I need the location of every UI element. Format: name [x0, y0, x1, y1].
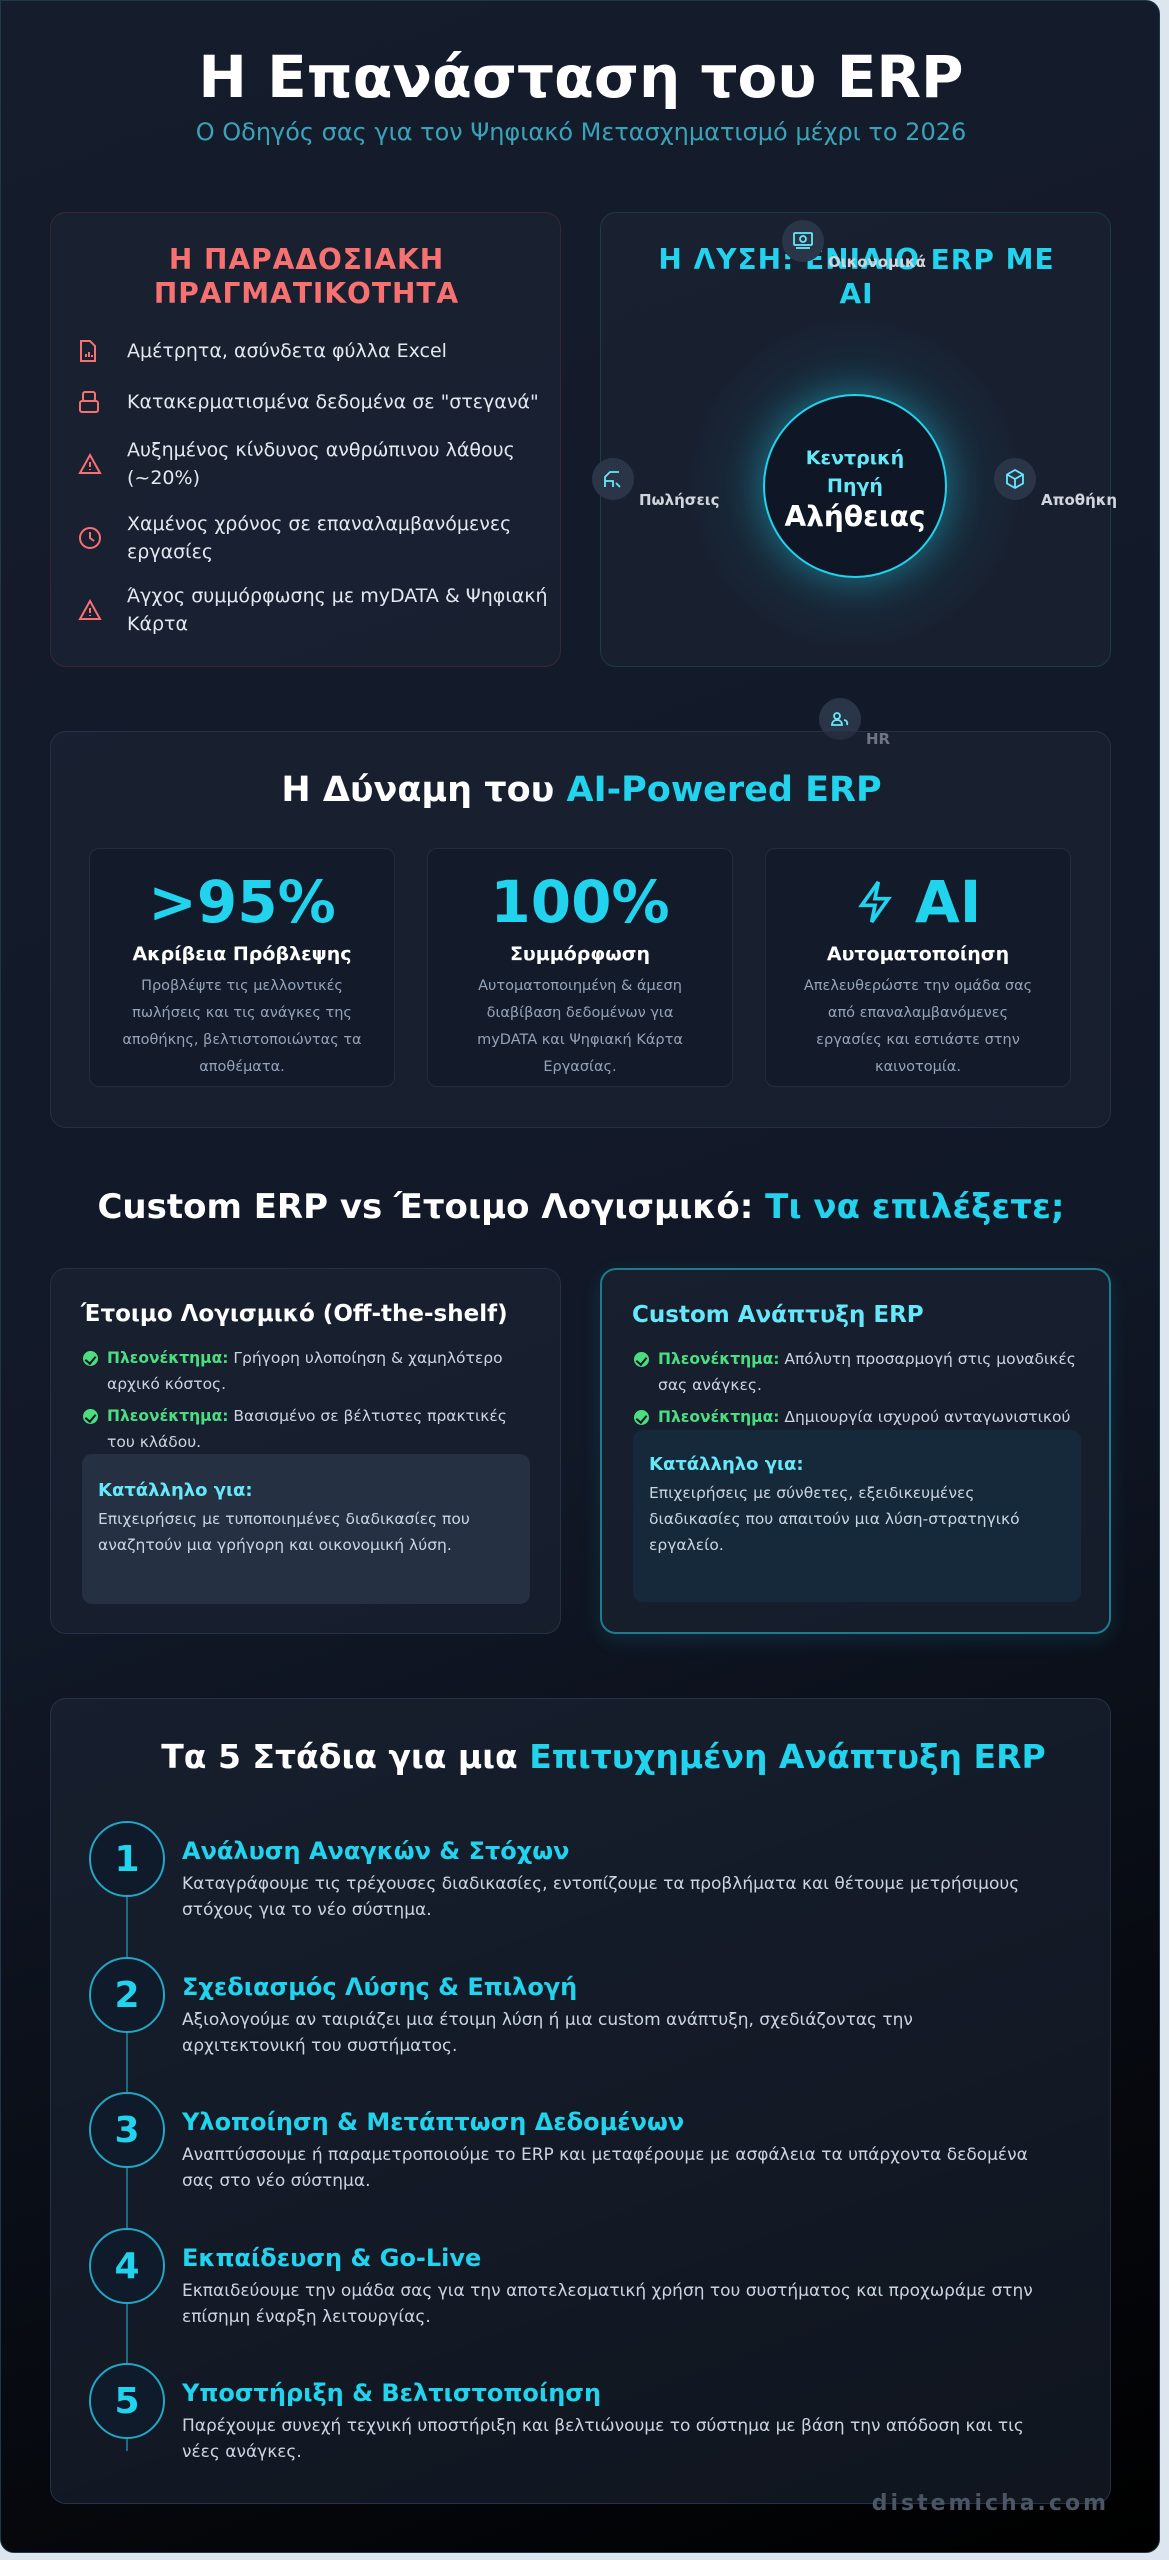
node: sales [592, 458, 634, 500]
panel: 5 stages [50, 1698, 1111, 2504]
stat: compliance [427, 848, 733, 1087]
heading: solution [658, 243, 1055, 310]
hub circle: Κεντρική [806, 447, 904, 469]
panel: off-the-shelf [50, 1268, 561, 1634]
panel: AI power [50, 731, 1111, 1128]
stat: automation: Αυτοματοποίηση [827, 943, 1009, 965]
item: time: Χαμένος χρόνος σε επαναλαμβανόμενες εργασίες [127, 513, 511, 563]
step 3: Αναπτύσσουμε ή παραμετροποιούμε το ERP και μεταφέρουμε με ασφάλεια τα υπάρχοντα δεδομένα σας στο νέο σύστημα. [182, 2145, 1028, 2191]
panel: custom [600, 1268, 1111, 1634]
step 2: Σχεδιασμός Λύσης & Επιλογή [182, 1973, 577, 2001]
step 5: 5 [114, 2380, 140, 2422]
bullet 1: Πλεονέκτημα: Απόλυτη προσαρμογή στις μοναδικές σας ανάγκες. [658, 1350, 1076, 1394]
suitable box [82, 1454, 530, 1604]
label: sales: Πωλήσεις [639, 491, 720, 509]
suitable box: Κατάλληλο για: [649, 1454, 804, 1475]
stat: compliance: 100% [490, 868, 670, 936]
item: silos: Κατακερματισμένα δεδομένα σε "στεγανά" [127, 391, 539, 413]
step 3 [89, 2092, 1028, 2191]
panel: traditional reality [50, 212, 561, 667]
heading: custom: Custom Ανάπτυξη ERP [632, 1302, 924, 1328]
subtitle: Ο Οδηγός σας για τον Ψηφιακό Μετασχηματισμό μέχρι το 2026 [196, 118, 966, 146]
step 3: 3 [114, 2110, 140, 2150]
label: HR: HR [866, 730, 890, 748]
step 4 [89, 2228, 1033, 2327]
suitable box: Επιχειρήσεις με τυποποιημένες διαδικασίες που αναζητούν μια γρήγορη και οικονομική λύση. [98, 1510, 470, 1554]
hub circle: Αλήθειας [785, 500, 925, 533]
heading: off-the-shelf: Έτοιμο Λογισμικό (Off-the-shelf) [81, 1301, 508, 1327]
step 1 [89, 1821, 1019, 1920]
node: finance [782, 220, 824, 262]
heading: traditional [154, 243, 459, 310]
stat: compliance: Συμμόρφωση [510, 943, 650, 965]
heading: solution: AI [839, 277, 874, 310]
step 5 [89, 2363, 1024, 2462]
item: compliance: Άγχος συμμόρφωσης με myDATA & Ψηφιακή Κάρτα [127, 585, 548, 635]
step 2 [89, 1957, 913, 2056]
step 3: Υλοποίηση & Μετάπτωση Δεδομένων [182, 2108, 684, 2136]
bullet 2: Πλεονέκτημα: Δημιουργία ισχυρού ανταγωνιστικού πλεονεκτήματος. [658, 1408, 1070, 1452]
suitable box [633, 1430, 1081, 1602]
step 5: Υποστήριξη & Βελτιστοποίηση [182, 2379, 601, 2407]
item: excel: Αμέτρητα, ασύνδετα φύλλα Excel [127, 340, 447, 362]
node: HR [819, 698, 861, 740]
stat: automation [765, 848, 1071, 1087]
step 1: Ανάλυση Αναγκών & Στόχων [182, 1837, 569, 1865]
title: Η Επανάσταση του ERP [198, 43, 964, 111]
panel: solution [600, 212, 1111, 667]
step 5: Παρέχουμε συνεχή τεχνική υποστήριξη και βελτιώνουμε το σύστημα με βάση την απόδοση και τις νέες ανάγκες. [182, 2416, 1024, 2462]
heading: solution: Η ΛΥΣΗ: ΕΝΙΑΙΟ ERP ΜΕ [658, 243, 1055, 276]
stat: automation: Απελευθερώστε την ομάδα σας από επαναλαμβανόμενες εργασίες και εστιάστε στην καινοτομία. [804, 978, 1032, 1075]
stat: automation: AI [915, 868, 981, 936]
heading: comparison: Custom ERP vs Έτοιμο Λογισμικό: Τι να επιλέξετε; [97, 1187, 1065, 1227]
step 4: Εκπαίδευση & Go-Live [182, 2244, 481, 2272]
step 4: Εκπαιδεύουμε την ομάδα σας για την αποτελεσματική χρήση του συστήματος και προχωράμε στην επίσημη έναρξη λειτουργίας. [182, 2281, 1033, 2327]
hub circle: Πηγή [827, 475, 883, 497]
bullet 2: Πλεονέκτημα: Βασισμένο σε βέλτιστες πρακτικές του κλάδου. [107, 1407, 507, 1451]
step 2: Αξιολογούμε αν ταιριάζει μια έτοιμη λύση ή μια custom ανάπτυξη, σχεδιάζοντας την αρχιτεκτονική του συστήματος. [182, 2010, 913, 2056]
footer brand: distemicha.com [872, 2491, 1109, 2516]
step 4: 4 [114, 2246, 140, 2286]
heading: traditional: ΠΡΑΓΜΑΤΙΚΟΤΗΤΑ [154, 277, 459, 310]
node: warehouse [994, 458, 1036, 500]
item: error: Αυξημένος κίνδυνος ανθρώπινου λάθους (~20%) [127, 439, 515, 489]
step 1: 1 [114, 1838, 140, 1880]
label: warehouse: Αποθήκη [1041, 491, 1117, 509]
bullet 1: Πλεονέκτημα: Γρήγορη υλοποίηση & χαμηλότερο αρχικό κόστος. [107, 1349, 503, 1393]
stat: accuracy: Προβλέψτε τις μελλοντικές πωλήσεις και τις ανάγκες της αποθήκης, βελτιστοποιώντας τα αποθέματα. [122, 978, 362, 1075]
stat: accuracy: Ακρίβεια Πρόβλεψης [132, 943, 352, 965]
suitable box: Επιχειρήσεις με σύνθετες, εξειδικευμένες διαδικασίες που απαιτούν μια λύση-στρατηγικό εργαλείο. [649, 1484, 1020, 1554]
label: finance: Οικονομικά [828, 253, 926, 271]
heading: stages: Τα 5 Στάδια για μια Επιτυχημένη Ανάπτυξη ERP [161, 1737, 1046, 1776]
stat: accuracy [89, 848, 395, 1087]
heading: traditional: Η ΠΑΡΑΔΟΣΙΑΚΗ [169, 243, 444, 276]
step 2: 2 [114, 1974, 140, 2016]
hub circle [763, 394, 947, 578]
suitable box: Κατάλληλο για: [98, 1480, 253, 1501]
stat: compliance: Αυτοματοποιημένη & άμεση διαβίβαση δεδομένων για myDATA και Ψηφιακή Κάρτα Εργασίας. [477, 978, 683, 1075]
stat: accuracy: >95% [148, 868, 336, 936]
heading: AI power: Η Δύναμη του AI-Powered ERP [281, 770, 882, 810]
step 1: Καταγράφουμε τις τρέχουσες διαδικασίες, εντοπίζουμε τα προβλήματα και θέτουμε μετρήσιμους στόχους για το νέο σύστημα. [182, 1874, 1019, 1920]
